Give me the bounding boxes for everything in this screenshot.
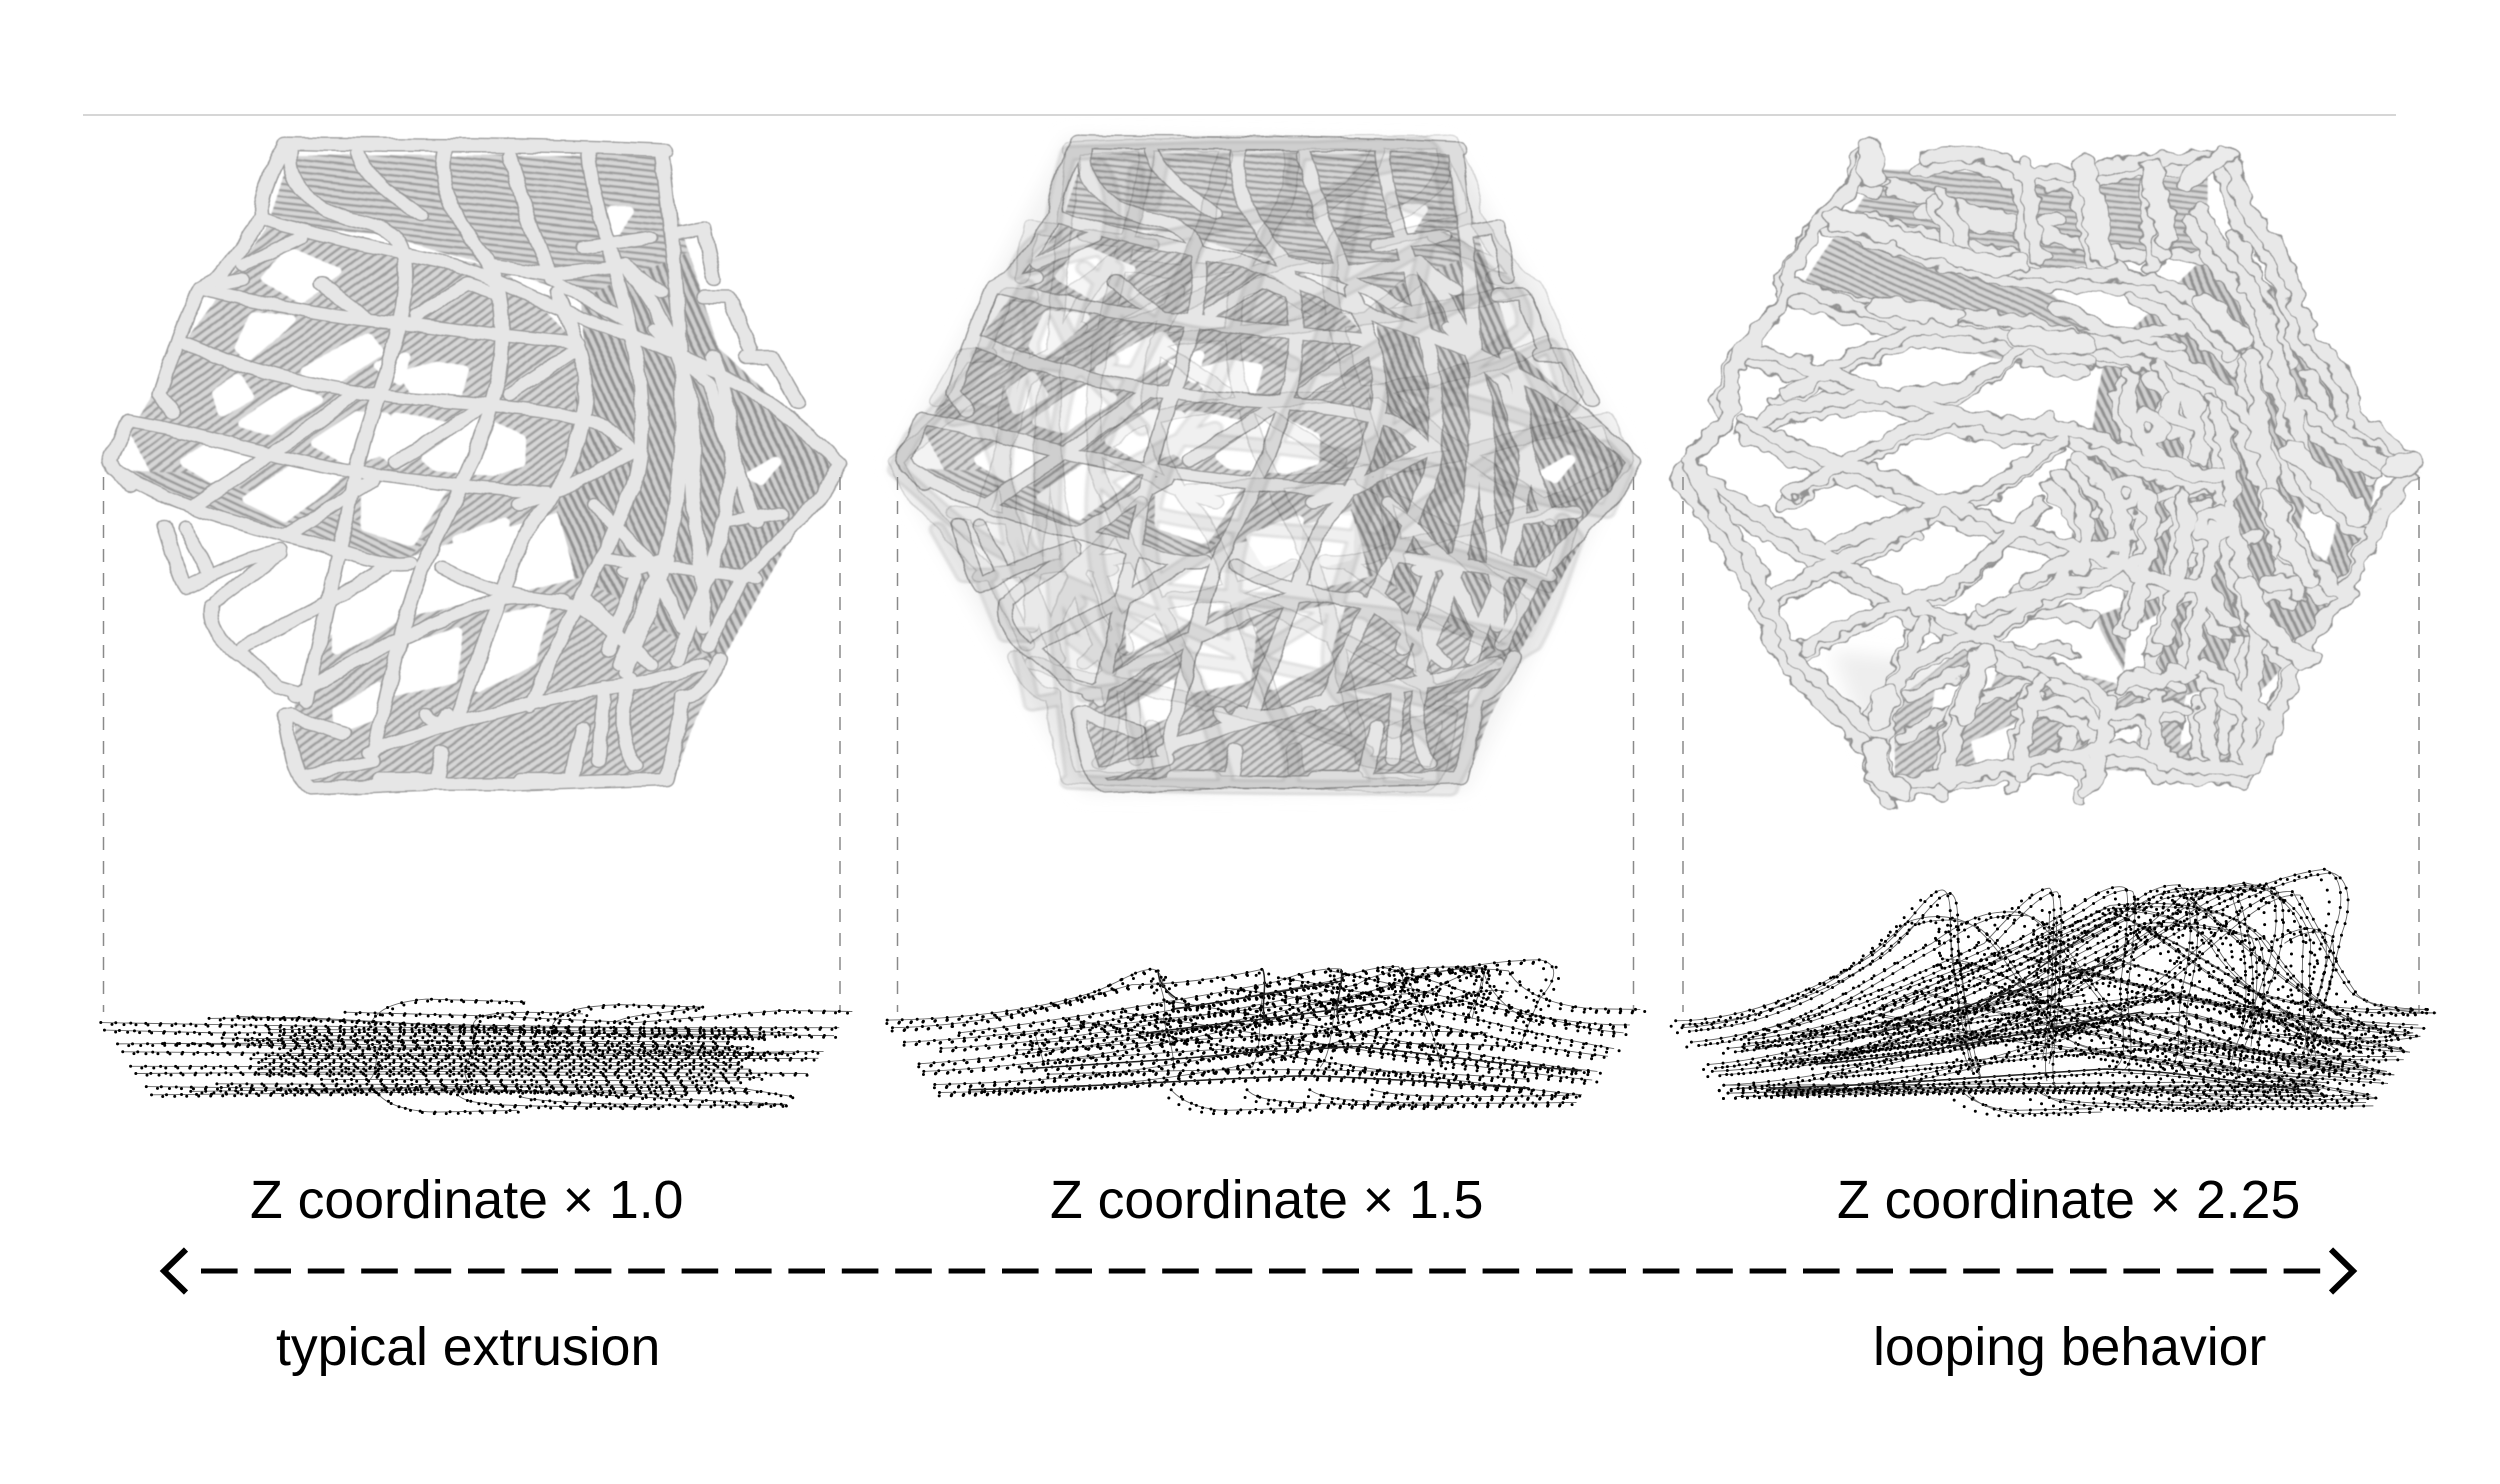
toolpath side view 3	[1664, 869, 2436, 1116]
toolpath side view 2	[880, 960, 1646, 1114]
ghost layer offset strands	[896, 144, 1625, 789]
ghost layer second copy	[896, 142, 1625, 787]
label: Z coordinate 1.5: Z coordinate × 1.5	[1050, 1170, 1484, 1230]
printed lattice hexagon 3	[1678, 144, 2413, 803]
double-headed dashed arrow	[164, 1250, 2353, 1292]
projection guide lines 1	[104, 477, 840, 1012]
panel: Z coordinate 1.5	[880, 137, 1646, 1230]
panel: Z coordinate 1.0	[101, 144, 857, 1230]
label: looping behavior: looping behavior	[1873, 1317, 2266, 1377]
soft halo of ghosted print	[893, 137, 1628, 793]
top divider rule	[83, 114, 2396, 116]
printed lattice hexagon 1	[110, 144, 839, 789]
label: Z coordinate 2.25: Z coordinate × 2.25	[1837, 1170, 2300, 1230]
label: Z coordinate 1.0: Z coordinate × 1.0	[250, 1170, 684, 1230]
label: typical extrusion: typical extrusion	[276, 1317, 660, 1377]
projection guide lines 2	[898, 477, 1634, 1012]
projection guide lines 3	[1683, 477, 2419, 1012]
printed lattice hexagon 2	[893, 137, 1633, 793]
toolpath side view 1	[101, 999, 857, 1114]
panel: Z coordinate 2.25	[1664, 144, 2436, 1230]
